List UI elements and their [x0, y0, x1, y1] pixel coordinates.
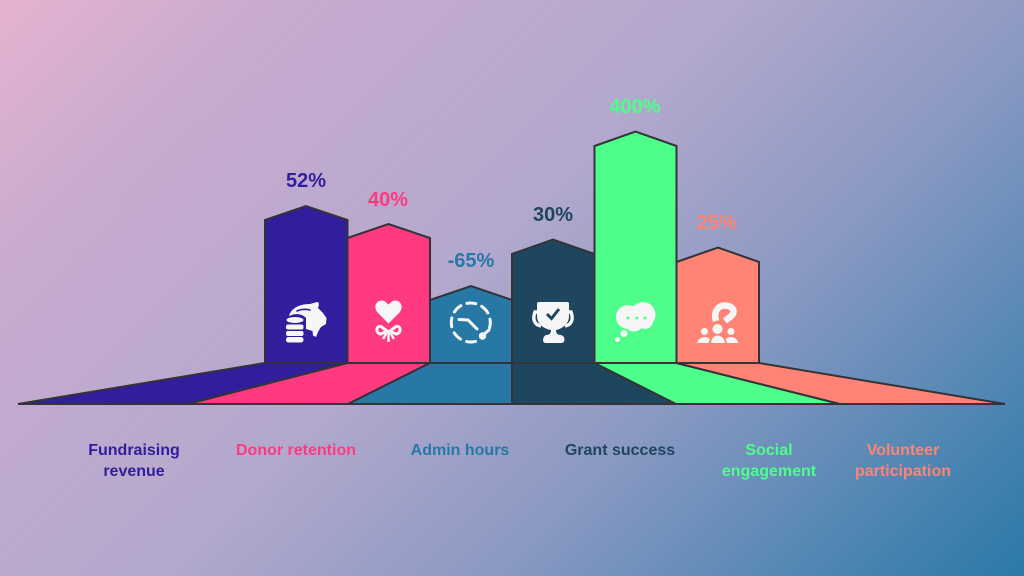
value: 25%: 25% [697, 212, 737, 234]
bar: social engagement [594, 132, 840, 404]
value: -65%: -65% [448, 250, 495, 272]
icon: dashed clock [451, 303, 490, 342]
bar: fundraising revenue [18, 206, 348, 404]
icon: piggy bank with coins [286, 302, 326, 342]
label: grant success: Grant success [565, 442, 675, 459]
bar: donor retention [188, 224, 430, 404]
label: volunteer participation: Volunteer [867, 442, 939, 459]
label: admin hours: Admin hours [411, 442, 509, 459]
value: 30%: 30% [533, 204, 573, 226]
label: volunteer participation: participation [855, 463, 951, 480]
icon: thought bubble [615, 302, 656, 342]
icon: question mark over people [697, 306, 738, 343]
bar: admin hours [348, 286, 512, 404]
bar: grant success [512, 240, 676, 404]
label: social engagement: Social [745, 442, 793, 459]
icon: heart with bow [375, 301, 402, 342]
label: social engagement: engagement [722, 463, 817, 480]
value: 40%: 40% [368, 189, 408, 211]
value: 400%: 400% [609, 96, 661, 118]
label: fundraising revenue: Fundraising [88, 442, 180, 459]
label: donor retention: Donor retention [236, 442, 356, 459]
value: 52%: 52% [286, 170, 326, 192]
label: fundraising revenue: revenue [103, 463, 165, 480]
icon: trophy with check [534, 302, 572, 343]
bar: volunteer participation [676, 248, 1005, 404]
